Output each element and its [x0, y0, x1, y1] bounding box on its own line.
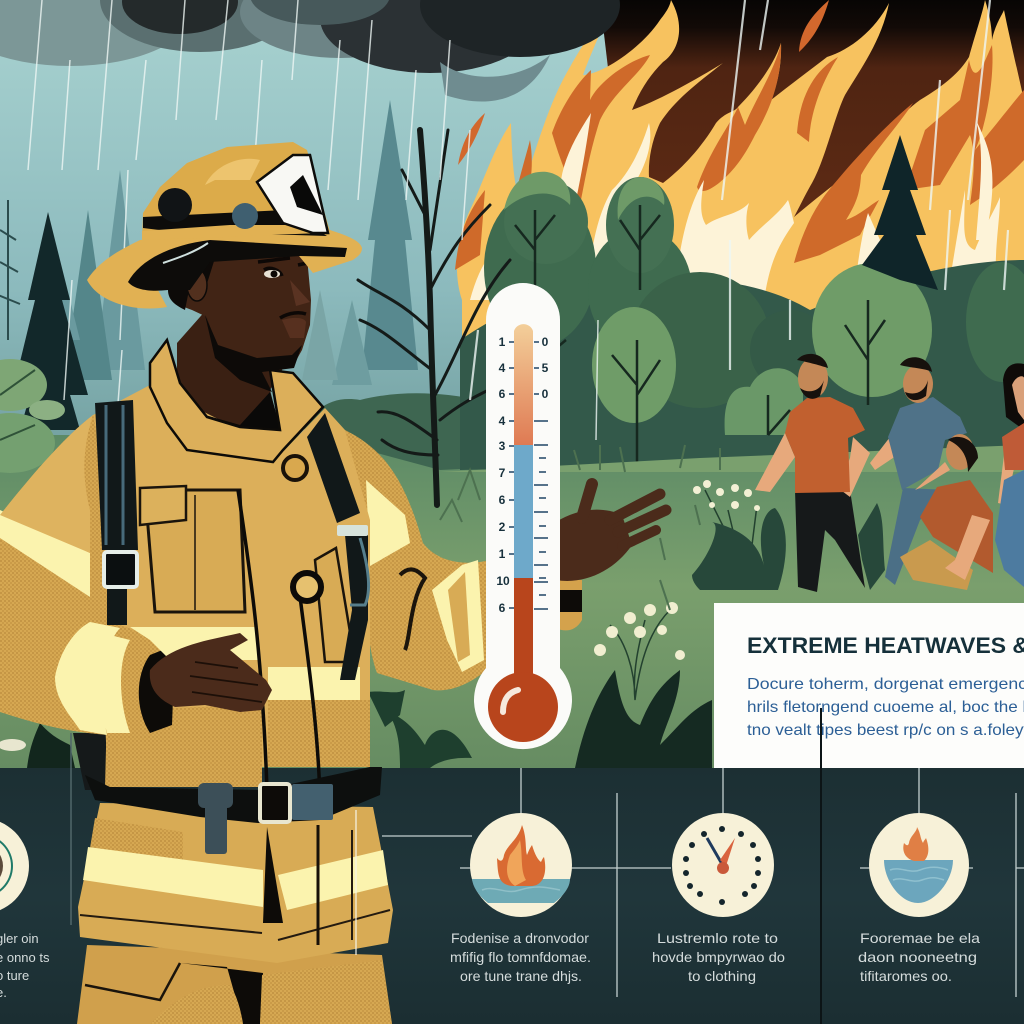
panel text: third column: Fooremae be ela [860, 930, 980, 946]
far arm sleeve [345, 430, 490, 690]
gesture cuff [555, 580, 582, 630]
crown shine [205, 159, 260, 185]
callout box [714, 603, 1024, 768]
fire backdrop [600, 0, 1024, 340]
pocket right [315, 548, 355, 662]
red lower tube and bulb [488, 578, 558, 742]
icon: partial ring at left [0, 818, 29, 914]
callout body text [747, 676, 1024, 739]
lamp knob [232, 203, 258, 229]
rain streaks [28, 0, 1008, 470]
left scale labels: 2 [499, 520, 506, 534]
dark conifer right [862, 135, 938, 290]
chest pocket [140, 486, 245, 612]
brow and mustache [258, 258, 312, 318]
thermometer casing [474, 283, 572, 749]
lower wildflower stems [610, 610, 670, 700]
small white flowers left [0, 739, 26, 751]
lips [282, 318, 306, 338]
gold flame silhouette [457, 0, 1024, 340]
icon: clock [672, 813, 774, 917]
panel text: second column: to clothing [688, 968, 756, 984]
hair [168, 246, 300, 310]
left scale labels [496, 335, 510, 615]
left scale labels: 1 [499, 335, 506, 349]
shoulder highlight [0, 415, 93, 553]
grass meadow [0, 435, 1024, 770]
torso [93, 383, 370, 767]
near arm stripes [0, 510, 130, 735]
left scale labels: 6 [499, 493, 506, 507]
yellow band strip [142, 225, 320, 240]
brim underside [128, 240, 347, 291]
eye white [264, 270, 280, 278]
right scale labels [542, 335, 549, 401]
left scale labels: 6 [499, 387, 506, 401]
harness strap right [307, 413, 369, 680]
left scale labels: 7 [499, 466, 506, 480]
panel text: third column: tifitaromes oo. [860, 968, 952, 984]
dark info panel [0, 768, 1024, 1024]
trousers [77, 945, 392, 1024]
helmet brim [87, 230, 362, 309]
gesture hand [556, 484, 666, 581]
chest reflective stripes [130, 627, 360, 700]
dark plant left [27, 723, 75, 768]
background sky [0, 0, 1024, 480]
right scale labels: 0 [542, 335, 549, 349]
panel text: first column: ore tune trane dhjs. [460, 968, 582, 984]
meadow plants [0, 445, 885, 768]
upper wildflower stems [705, 490, 757, 560]
helmet band [143, 210, 327, 236]
coat buttons [283, 456, 321, 601]
callout heading: EXTREME HEATWAVES & [747, 633, 1024, 658]
panel text: third column: daon nooneetng [858, 949, 977, 965]
scale ticks [509, 342, 548, 609]
right scale labels: 5 [542, 361, 549, 375]
black undershirt [205, 392, 281, 458]
left scale labels: 1 [499, 547, 506, 561]
back strap behind waist [73, 733, 110, 790]
helmet [87, 142, 362, 309]
lamp left [158, 188, 192, 222]
callout body text: tno vealt tipes beest rp/c on s a.foleyv [747, 722, 1024, 739]
left scale labels: 4 [499, 414, 506, 428]
white goggle badge [257, 155, 328, 233]
pale flame cores [470, 113, 1000, 340]
firefighter [0, 142, 666, 1024]
left scale labels: 6 [499, 601, 506, 615]
left scale labels: 3 [499, 439, 506, 453]
pupil [270, 270, 278, 278]
callout body text: hrils fletorngend cuoeme al, boc the h [747, 699, 1024, 716]
cuff band [555, 590, 582, 612]
panel text: second column [652, 930, 785, 984]
lower hand [150, 633, 272, 712]
thermometer [474, 283, 572, 749]
nose [290, 280, 310, 306]
harness strap left [95, 400, 138, 625]
near arm [0, 415, 175, 736]
neck [177, 300, 300, 460]
panel text: left column [0, 931, 50, 1000]
panel text: first column: Fodenise a dronvodor [451, 930, 589, 946]
lower wildflower blossoms [594, 602, 685, 660]
ember [458, 0, 829, 165]
man in blue shirt [870, 357, 967, 585]
fern centre [368, 690, 472, 768]
panel connector lines [382, 768, 1024, 997]
belt [85, 767, 382, 854]
lower plant leaves [575, 670, 712, 768]
woman at right edge [995, 363, 1024, 587]
ear [187, 269, 207, 301]
icon: flame in water bowl [869, 813, 969, 917]
right scale labels: 0 [542, 387, 549, 401]
beard [205, 315, 302, 392]
coat centre seams [238, 490, 320, 800]
left foliage [0, 359, 65, 473]
orange inner flames [455, 43, 1024, 270]
left scale labels: 10 [496, 574, 510, 588]
helmet crown [142, 142, 330, 240]
lower coat [78, 803, 393, 963]
seated man [900, 434, 993, 590]
collar [150, 340, 323, 462]
panel text: second column: Lustremlo rote to [657, 930, 778, 946]
cool middle tube [514, 445, 533, 578]
grass tufts [440, 445, 720, 610]
panel text: first column [450, 930, 591, 984]
upper plant leaves [692, 503, 885, 590]
hot upper tube [514, 324, 533, 445]
civilians group [755, 354, 1024, 592]
textured belly [105, 700, 370, 787]
man in orange shirt [755, 354, 870, 592]
face [170, 251, 311, 370]
wildfire [455, 0, 1024, 340]
dark conifer left [12, 212, 88, 430]
black divider line [820, 708, 822, 1024]
panel text: third column [858, 930, 980, 984]
green trees [440, 172, 1024, 472]
panel text: second column: hovde bmpyrwao do [652, 949, 785, 965]
icon: flame over water [470, 813, 572, 917]
left scale labels: 4 [499, 361, 506, 375]
bare tree [358, 130, 510, 505]
storm clouds [0, 0, 620, 102]
brim underside highlight [163, 243, 208, 263]
dark glove opening [139, 645, 175, 733]
upper wildflower blossoms [693, 480, 760, 511]
distant pale conifers [0, 100, 418, 385]
panel text: first column: mfifig flo tomnfdomae. [450, 949, 591, 965]
dark vertical line left [70, 733, 72, 925]
distant dark hill [300, 393, 480, 470]
callout body text: Docure toherm, dorgenat emergenc [747, 676, 1024, 693]
badge hole [290, 175, 323, 215]
